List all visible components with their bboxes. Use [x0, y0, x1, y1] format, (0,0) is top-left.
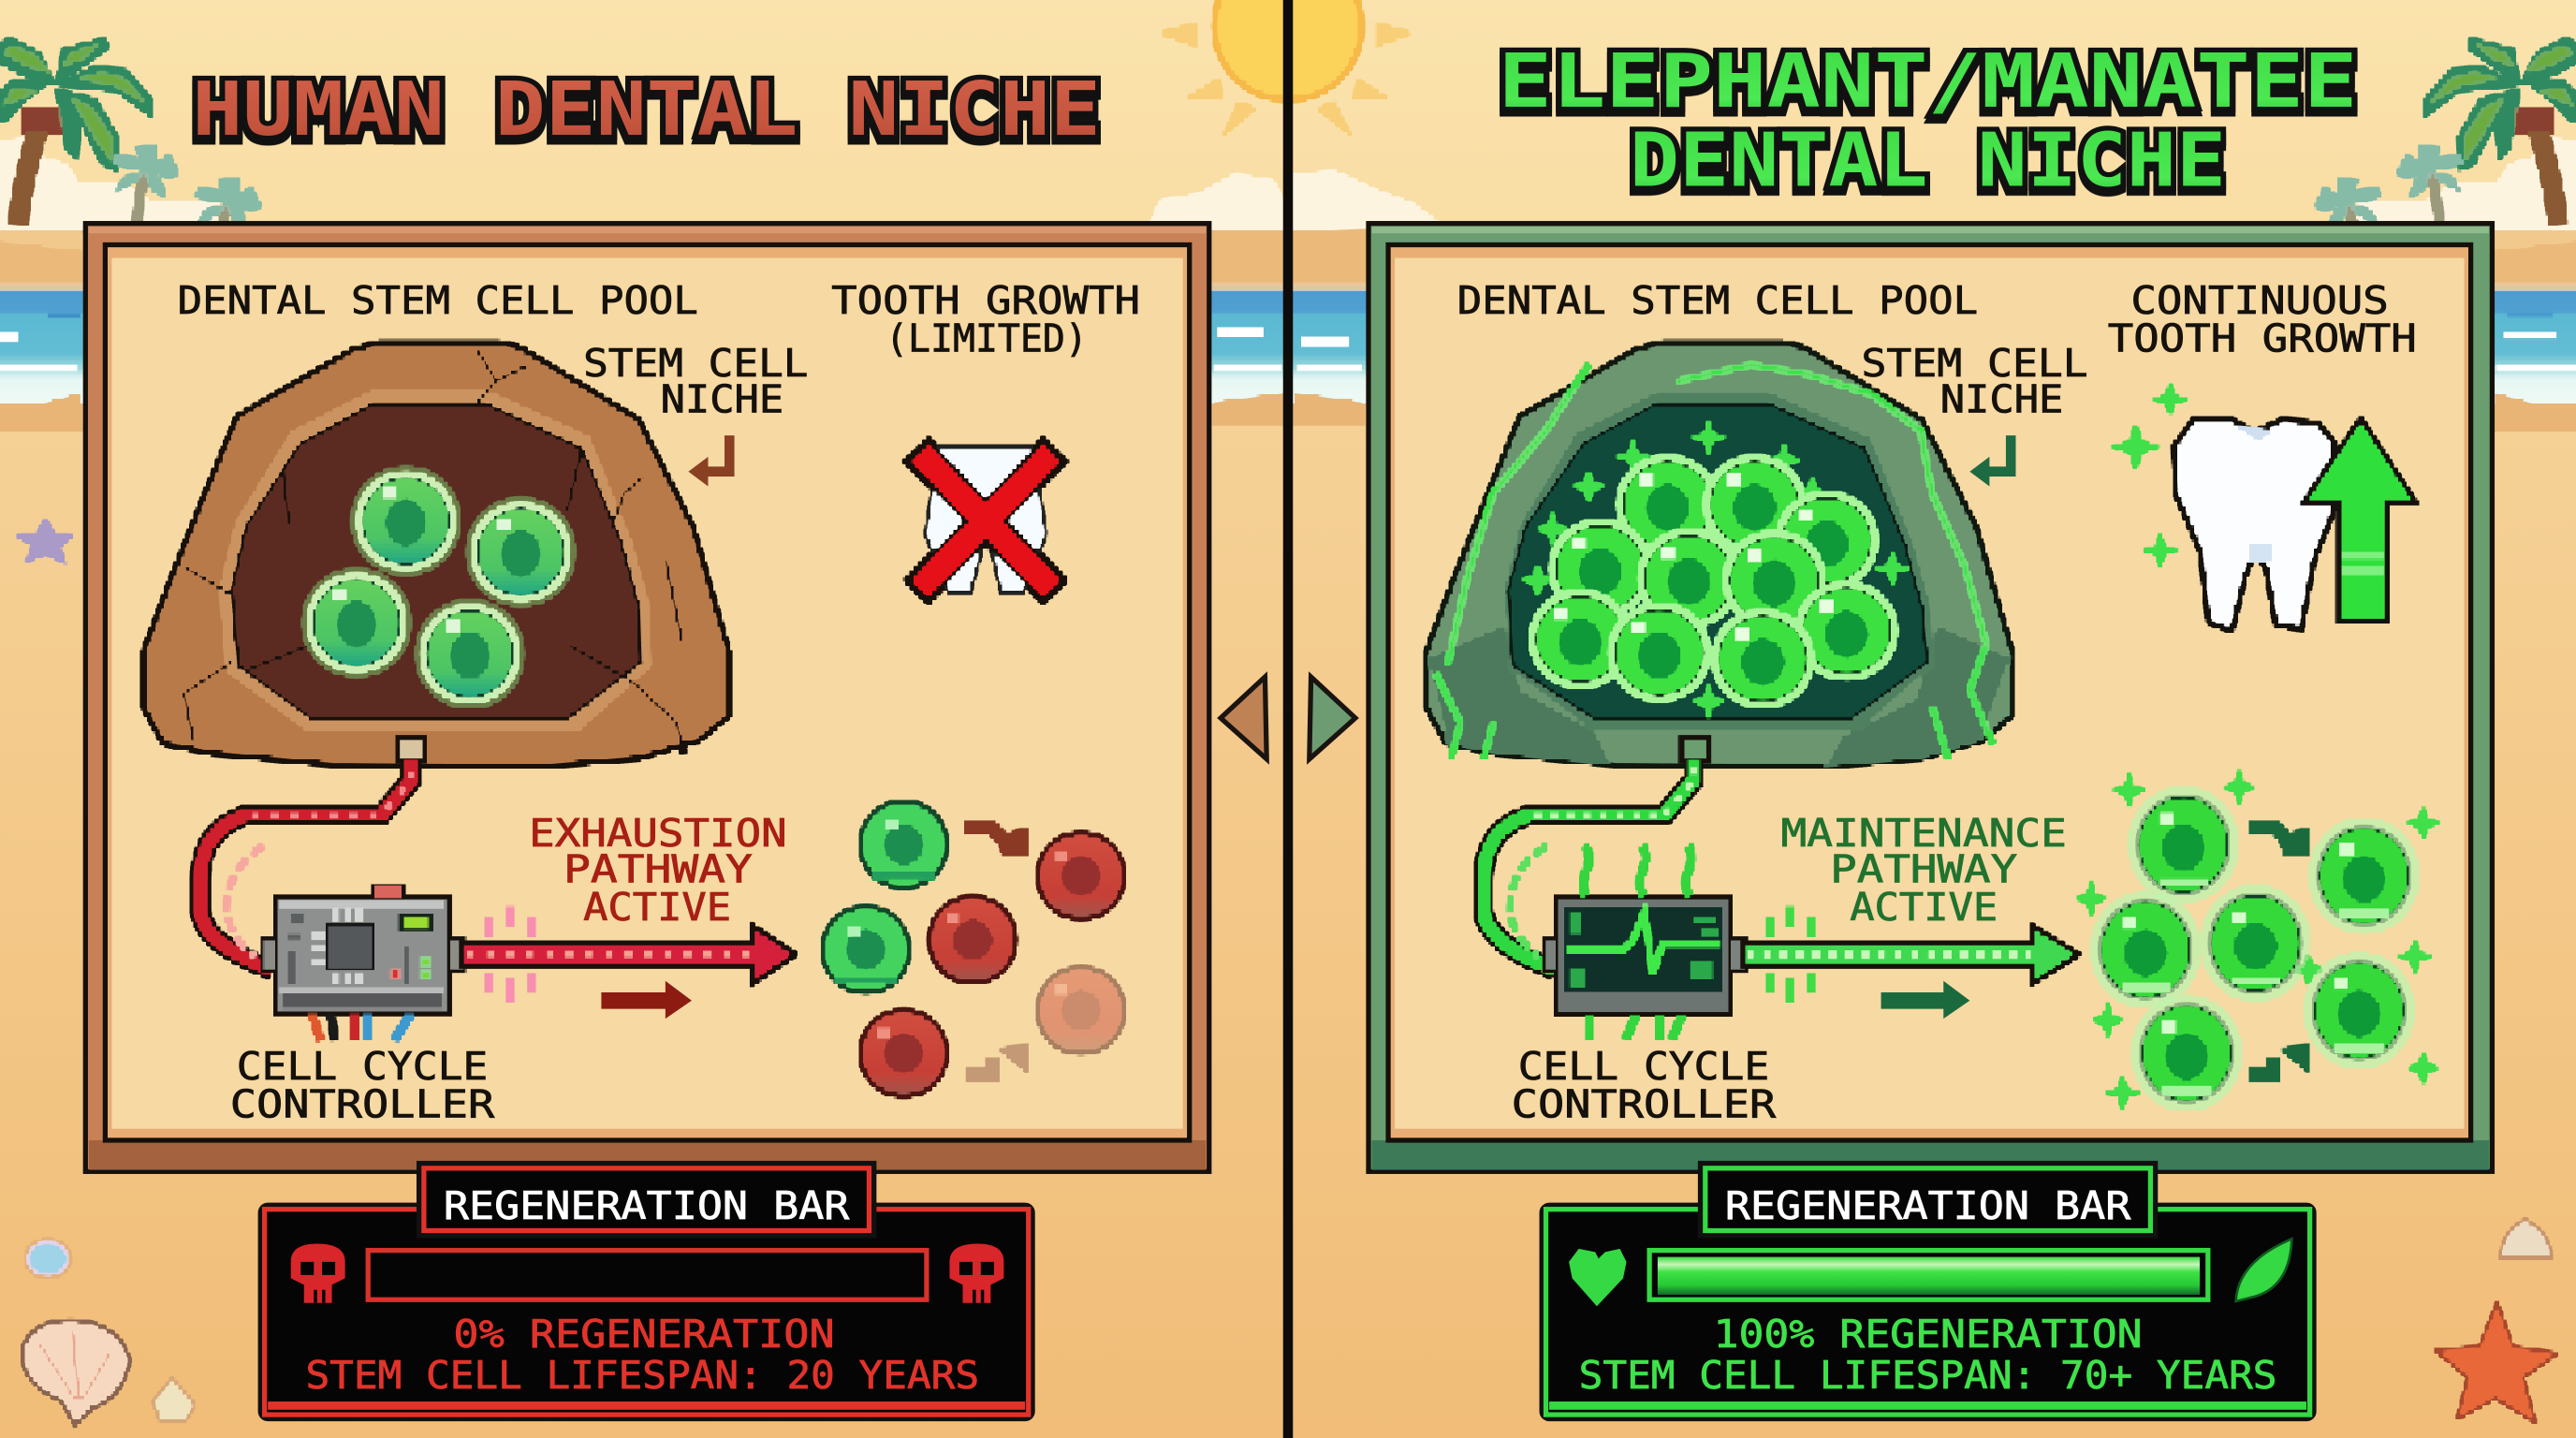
tab: REGENERATION BAR: [1725, 1183, 2131, 1228]
wire: red signal cable: [200, 740, 424, 969]
small direction arrow: [1881, 981, 1969, 1019]
arrow: niche hook: [1969, 435, 2011, 486]
sparks around controller: [487, 907, 534, 1003]
arrow: niche hook: [688, 435, 729, 486]
label: cell cycle controller: [230, 1044, 495, 1126]
readout: 0% REGENERATION: [453, 1312, 835, 1357]
cells turning exhausted: [822, 800, 1125, 1097]
panel: human dental niche: [85, 224, 1209, 1171]
small direction arrow: [601, 981, 692, 1019]
arrow: pointing to human side: [1221, 677, 1266, 759]
stem cell cluster in niche: [1530, 455, 1897, 708]
tab: REGENERATION BAR: [444, 1183, 850, 1228]
panel frame: [85, 224, 1209, 1171]
icon: skull left: [291, 1244, 345, 1303]
label: maintenance pathway active: MAINTENANCE: [1781, 811, 2067, 856]
small arrows between cells: [2249, 829, 2308, 1075]
heading: dental stem cell pool: DENTAL STEM CELL POOL: [178, 278, 698, 323]
arrow: maintenance pathway: [1745, 929, 2076, 981]
icon: leaf: [2236, 1239, 2291, 1301]
purple starfish: [17, 520, 72, 564]
icon: heart: [1569, 1249, 1627, 1306]
wire: green signal cable: [1484, 740, 1707, 969]
title: elephant/manatee: DENTAL NICHE: [1630, 117, 2226, 203]
readout: [305, 1312, 979, 1398]
icon: cell cycle controller monitor: [1546, 846, 1745, 1038]
title: elephant/manatee: [1499, 38, 2358, 203]
icon: cell cycle controller chip: [263, 886, 463, 1040]
label: stem cell niche: [583, 341, 809, 422]
tan shell: [2502, 1221, 2550, 1257]
blue shell: [26, 1240, 69, 1277]
title: elephant/manatee: ELEPHANT/MANATEE: [1499, 38, 2358, 125]
heading: tooth growth limited: (LIMITED): [886, 316, 1088, 361]
stem cells in niche: [302, 466, 575, 708]
icon: crossed out tooth: [927, 447, 1045, 592]
label: stem cell niche: STEM CELL: [1862, 341, 2088, 386]
label: cell cycle controller: CONTROLLER: [1512, 1081, 1776, 1126]
icon: skull right: [949, 1244, 1003, 1303]
center divider: [1283, 0, 1293, 1438]
heading: dental stem cell pool: DENTAL STEM CELL POOL: [1457, 278, 1978, 323]
palm trees right: [2315, 37, 2576, 259]
icon: healthy tooth: [2175, 420, 2333, 629]
label: cell cycle controller: [1512, 1044, 1776, 1126]
small arrows between cells: [966, 829, 1027, 1075]
readout: 100% REGENERATION: [1714, 1312, 2143, 1357]
readout: STEM CELL LIFESPAN: 20 YEARS: [305, 1353, 979, 1398]
sun: [1158, 0, 1412, 135]
label: stem cell niche: STEM CELL: [583, 341, 809, 386]
heading: tooth growth limited: TOOTH GROWTH: [831, 278, 1140, 323]
sparks around controller: [1767, 907, 1814, 1003]
readout: STEM CELL LIFESPAN: 70+ YEARS: [1579, 1353, 2277, 1398]
title: human: HUMAN DENTAL NICHE: [192, 66, 1101, 153]
icon: cracked stem cell niche rock: [145, 344, 728, 766]
icon: glowing stem cell niche rock: [1427, 344, 2011, 766]
label: cell cycle controller: CELL CYCLE: [1518, 1044, 1769, 1089]
orange starfish: [2438, 1306, 2554, 1419]
palm trees left: [0, 37, 261, 259]
heading: continuous tooth growth: [2108, 278, 2417, 361]
label: exhaustion pathway active: EXHAUSTION: [529, 811, 787, 856]
arrow: exhaustion pathway: [463, 929, 794, 981]
label: maintenance pathway active: PATHWAY: [1830, 846, 2017, 891]
heading: continuous tooth growth: TOOTH GROWTH: [2108, 316, 2417, 361]
label: stem cell niche: NICHE: [1940, 377, 2063, 422]
arrow: tooth growth up: [2306, 420, 2413, 621]
regeneration bar: human: [261, 1164, 1032, 1418]
clouds: [0, 138, 2576, 230]
label: exhaustion pathway active: ACTIVE: [583, 885, 731, 930]
tab: [419, 1164, 874, 1236]
arrow: pointing to elephant side: [1310, 677, 1355, 759]
label: cell cycle controller: CONTROLLER: [230, 1081, 495, 1126]
label: stem cell niche: NICHE: [661, 377, 783, 422]
empty bar track: [368, 1251, 927, 1299]
full bar: [1649, 1251, 2208, 1299]
panel: elephant manatee dental niche: [1368, 224, 2492, 1171]
label: exhaustion pathway active: [529, 811, 787, 930]
heading: tooth growth limited: [831, 278, 1140, 361]
decoration: beach shells and starfish: [17, 520, 2554, 1423]
healthy renewing cells: [2075, 770, 2439, 1110]
label: exhaustion pathway active: PATHWAY: [564, 846, 753, 891]
sand and sea: [0, 227, 2576, 431]
label: stem cell niche: [1862, 341, 2088, 422]
tab: [1701, 1164, 2156, 1236]
sparkles around tooth: [2113, 383, 2187, 566]
scallop shell: [23, 1321, 128, 1423]
small shell: [154, 1380, 194, 1419]
label: maintenance pathway active: [1781, 811, 2067, 930]
regeneration bar: elephant manatee: [1543, 1164, 2313, 1418]
readout: [1579, 1312, 2277, 1398]
label: cell cycle controller: CELL CYCLE: [237, 1044, 488, 1089]
panel frame: [1368, 224, 2492, 1171]
label: maintenance pathway active: ACTIVE: [1850, 885, 1998, 930]
heading: continuous tooth growth: CONTINUOUS: [2130, 278, 2389, 323]
